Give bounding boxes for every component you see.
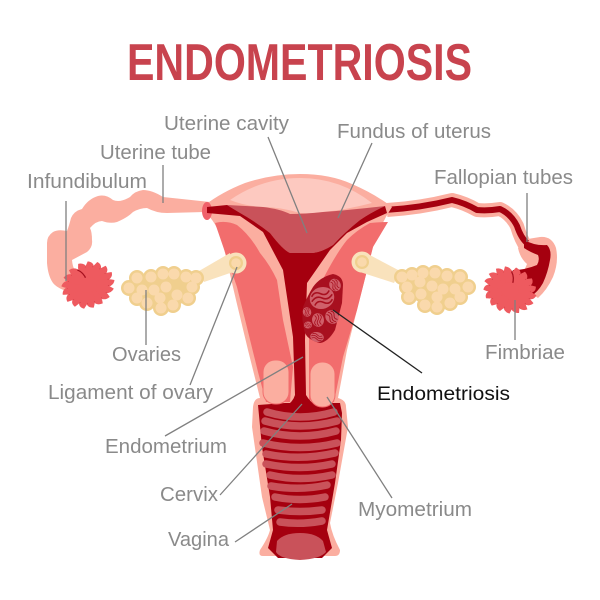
leader lines [66, 137, 527, 542]
label: Fallopian tubes: Fallopian tubes [434, 167, 573, 189]
left pod [263, 360, 289, 404]
right uterine tube [387, 200, 557, 298]
right myometrium [309, 222, 388, 402]
right pod [310, 362, 335, 407]
endometriosis lesion [301, 274, 343, 343]
label: Uterine cavity: Uterine cavity [164, 113, 289, 135]
label: Fimbriae: Fimbriae [485, 342, 565, 364]
label: Endometriosis: Endometriosis [377, 384, 510, 405]
left ovary with ligament [121, 252, 246, 316]
label: Uterine tube: Uterine tube [100, 142, 211, 164]
fundus lens [230, 178, 372, 213]
right ovary with ligament [352, 252, 476, 315]
label: Cervix: Cervix [160, 484, 218, 506]
label: Endometrium: Endometrium [105, 436, 227, 458]
label: Fundus of uterus: Fundus of uterus [337, 121, 491, 143]
title: ENDOMETRIOSIS [127, 34, 472, 92]
label: Ligament of ovary: Ligament of ovary [48, 382, 213, 404]
label: Myometrium: Myometrium [358, 499, 472, 521]
label: Infundibulum: Infundibulum [27, 171, 147, 193]
left fimbriae [54, 254, 122, 317]
label: Ovaries: Ovaries [112, 344, 181, 366]
tube junction [202, 202, 212, 220]
endometrium canal [207, 205, 387, 407]
right fimbriae [476, 259, 544, 322]
label: Vagina: Vagina [168, 529, 230, 551]
cervix and vagina lumen with ridges [258, 403, 342, 560]
left uterine tube [47, 190, 210, 292]
left myometrium [215, 222, 293, 402]
right tube lumen [385, 200, 551, 297]
uterine cavity [227, 205, 385, 253]
uterus outer wall and cervix sleeve [205, 174, 392, 556]
